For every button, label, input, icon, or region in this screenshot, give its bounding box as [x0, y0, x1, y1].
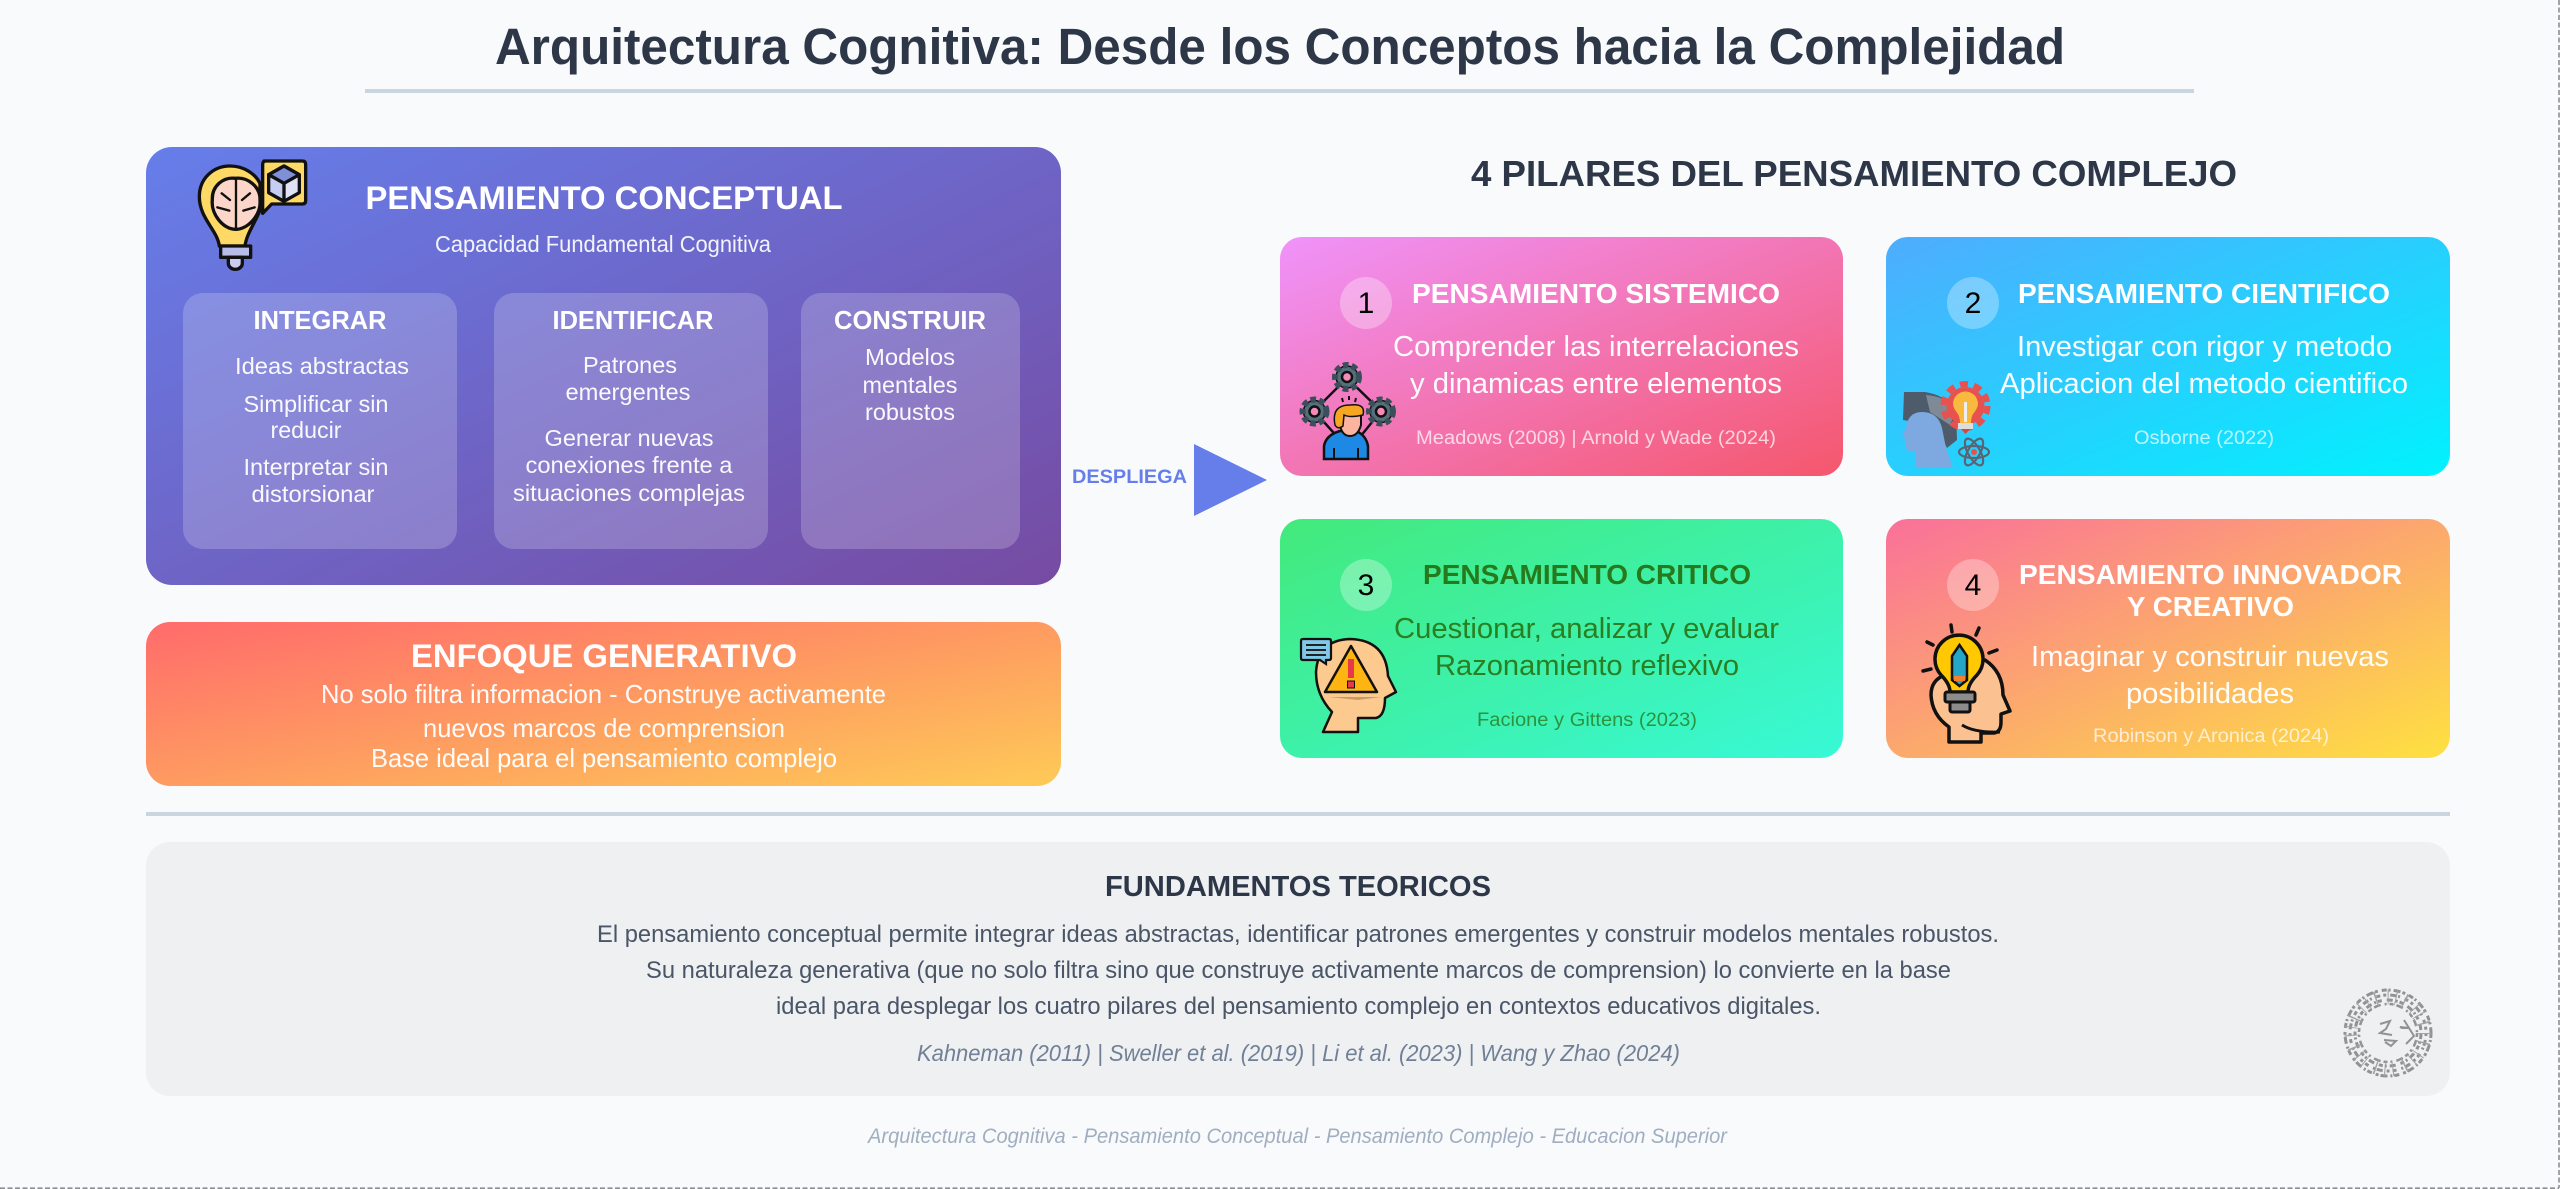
text: sistemico description: Comprender las interrelaciones	[1393, 331, 1799, 363]
badge: 4: 4	[1965, 569, 1981, 602]
text: sistemico description: y dinamicas entre elementos	[1410, 368, 1782, 400]
icon: circular seal	[2345, 990, 2431, 1076]
card: construir	[801, 293, 1020, 549]
arrow: despliega	[1072, 444, 1267, 516]
heading: fundamentos: FUNDAMENTOS TEORICOS	[1105, 871, 1491, 903]
text: innovador description	[2031, 641, 2389, 710]
text: fundamentos body: ideal para desplegar los cuatro pilares del pensamiento complejo en contextos educativos digitales.	[776, 993, 1821, 1020]
icon: head with warning	[1301, 639, 1396, 732]
citation: Meadows (2008) | Arnold y Wade (2024)	[1416, 427, 1776, 449]
heading: critico: PENSAMIENTO CRITICO	[1423, 559, 1751, 590]
icon: head, bulb gear and atom	[1902, 384, 1989, 468]
card: integrar	[183, 293, 457, 549]
citation: Facione y Gittens (2023)	[1477, 709, 1697, 731]
text: integrar items: Interpretar sin	[244, 454, 388, 480]
badge: 4	[1947, 559, 1999, 611]
text: integrar items: Ideas abstractas	[235, 353, 409, 379]
citation: Osborne (2022)	[2134, 427, 2274, 449]
panel: enfoque generativo	[146, 622, 1061, 786]
card: pensamiento cientifico	[1886, 237, 2450, 476]
heading: 4 pilares: 4 PILARES DEL PENSAMIENTO COMPLEJO	[1471, 153, 2237, 194]
text: identificar items: Generar nuevas	[544, 425, 714, 451]
heading: pensamiento conceptual: PENSAMIENTO CONCEPTUAL	[366, 179, 842, 216]
text: integrar items: distorsionar	[252, 481, 375, 507]
text: enfoque description: No solo filtra informacion - Construye activamente	[321, 679, 886, 709]
text: fundamentos body	[597, 921, 1999, 1020]
title: Arquitectura Cognitiva: Desde los Conceptos hacia la Complejidad	[495, 18, 2065, 75]
badge: 1: 1	[1358, 287, 1374, 320]
citation: Robinson y Aronica (2024)	[2093, 725, 2329, 747]
card: identificar	[494, 293, 768, 549]
text: identificar items: Patrones	[583, 352, 677, 378]
text: fundamentos body: El pensamiento conceptual permite integrar ideas abstractas, identificar patrones emergentes y construir modelos mentales robustos.	[597, 921, 1999, 948]
badge: 3	[1340, 559, 1392, 611]
heading: innovador	[2019, 559, 2402, 622]
heading: innovador: PENSAMIENTO INNOVADOR	[2019, 559, 2402, 590]
text: fundamentos body: Su naturaleza generativa (que no solo filtra sino que construye activamente marcos de comprension) lo convierte en la base	[646, 957, 1951, 984]
badge: 3: 3	[1358, 569, 1374, 602]
arrow: despliega: DESPLIEGA	[1072, 466, 1187, 488]
text: construir items: Modelos	[865, 344, 955, 370]
icon: bulb with brain and cube	[199, 161, 306, 269]
text: critico description: Razonamiento reflexivo	[1435, 650, 1739, 682]
text: enfoque description	[321, 679, 886, 773]
panel: pensamiento conceptual	[146, 147, 1061, 585]
heading: innovador: Y CREATIVO	[2127, 591, 2294, 622]
heading: identificar: IDENTIFICAR	[552, 305, 714, 335]
references: Kahneman (2011) | Sweller et al. (2019) | Li et al. (2023) | Wang y Zhao (2024)	[917, 1040, 1680, 1066]
heading: sistemico: PENSAMIENTO SISTEMICO	[1412, 278, 1780, 309]
text: identificar items	[513, 352, 745, 506]
text: cientifico description: Investigar con rigor y metodo	[2017, 331, 2392, 363]
icon: person with gears	[1302, 365, 1393, 459]
heading: enfoque generativo: ENFOQUE GENERATIVO	[411, 637, 797, 674]
heading: cientifico: PENSAMIENTO CIENTIFICO	[2018, 278, 2390, 309]
card: pensamiento innovador	[1886, 519, 2450, 758]
text: identificar items: emergentes	[566, 379, 690, 405]
card: pensamiento sistemico	[1280, 237, 1843, 476]
text: identificar items: conexiones frente a	[526, 452, 733, 478]
text: construir items: mentales	[862, 372, 958, 398]
badge: 2: 2	[1965, 287, 1981, 320]
heading: integrar: INTEGRAR	[254, 305, 387, 335]
text: integrar items: Simplificar sin	[244, 391, 388, 417]
text: enfoque description: nuevos marcos de comprension	[423, 713, 785, 743]
text: integrar items: reducir	[270, 417, 342, 443]
text: construir items	[862, 344, 958, 425]
text: sistemico description	[1393, 331, 1799, 400]
badge: 2	[1947, 277, 1999, 329]
text: innovador description: posibilidades	[2126, 678, 2294, 710]
text: innovador description: Imaginar y construir nuevas	[2031, 641, 2389, 673]
text: cientifico description: Aplicacion del metodo cientifico	[2000, 368, 2408, 400]
panel: fundamentos teoricos	[146, 842, 2450, 1096]
text: enfoque description: Base ideal para el pensamiento complejo	[371, 743, 837, 773]
icon: head with pencil bulb	[1923, 625, 2010, 742]
footer: Arquitectura Cognitiva - Pensamiento Conceptual - Pensamiento Complejo - Educacion Superior	[866, 1125, 1728, 1148]
text: cientifico description	[2000, 331, 2408, 400]
subtitle: Capacidad Fundamental Cognitiva	[435, 231, 771, 257]
text: identificar items: situaciones complejas	[513, 480, 745, 506]
text: integrar items	[235, 353, 409, 507]
text: critico description	[1394, 613, 1779, 682]
text: critico description: Cuestionar, analizar y evaluar	[1394, 613, 1779, 645]
heading: construir: CONSTRUIR	[834, 305, 986, 335]
text: construir items: robustos	[865, 399, 955, 425]
badge: 1	[1340, 277, 1392, 329]
card: pensamiento critico	[1280, 519, 1843, 758]
